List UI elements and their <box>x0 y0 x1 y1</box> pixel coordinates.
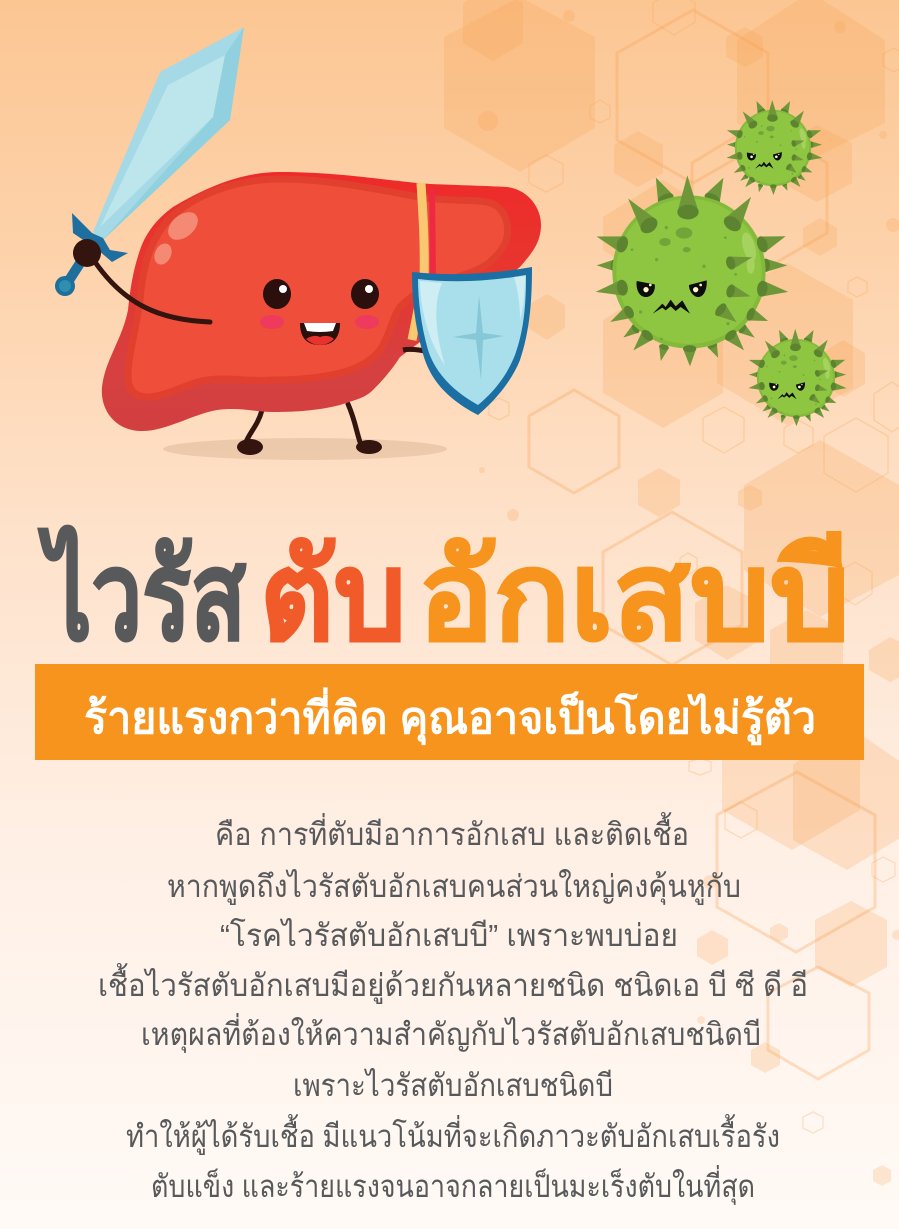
background hexagon pattern <box>444 0 899 1186</box>
description text: เหตุผลที่ต้องให้ความสำคัญกับไวรัสตับอักเสบชนิดบี <box>141 1013 761 1054</box>
subtitle banner <box>35 664 864 760</box>
icon: sword <box>55 27 244 296</box>
liver highlights <box>163 207 203 245</box>
description text: ตับแข็ง และร้ายแรงจนอาจกลายเป็นมะเร็งตับในที่สุด <box>151 1165 755 1206</box>
face <box>260 279 379 345</box>
title <box>38 526 850 666</box>
description text: เพราะไวรัสตับอักเสบชนิดบี <box>293 1068 613 1103</box>
icon: small virus top <box>726 99 823 195</box>
illustration: liver character with sword and shield <box>55 27 541 460</box>
description text: เชื้อไวรัสตับอักเสบมีอยู่ด้วยกันหลายชนิด ชนิดเอ บี ซี ดี อี <box>98 963 808 1004</box>
description text: ทำให้ผู้ได้รับเชื้อ มีแนวโน้มที่จะเกิดภาวะตับอักเสบเรื้อรัง <box>126 1114 780 1155</box>
ground shadow <box>163 438 447 460</box>
ligament stripe <box>432 190 433 275</box>
title: ไวรัส <box>38 526 246 666</box>
description text <box>98 812 808 1206</box>
icon: large virus <box>594 174 789 366</box>
subtitle banner: ร้ายแรงกว่าที่คิด คุณอาจเป็นโดยไม่รู้ตัว <box>84 687 816 746</box>
description text: “โรคไวรัสตับอักเสบบี” เพราะพบบ่อย <box>220 918 678 953</box>
arm <box>95 262 210 322</box>
title: ตับ <box>260 528 406 666</box>
icon: small virus bottom <box>748 328 847 426</box>
description text: หากพูดถึงไวรัสตับอักเสบคนส่วนใหญ่คงคุ้นหูกับ <box>167 869 741 906</box>
legs <box>246 404 360 442</box>
icon: shield <box>412 267 532 415</box>
description text: คือ การที่ตับมีอาการอักเสบ และติดเชื้อ <box>215 812 689 852</box>
title: อักเสบบี <box>418 528 850 666</box>
liver body <box>102 172 541 431</box>
